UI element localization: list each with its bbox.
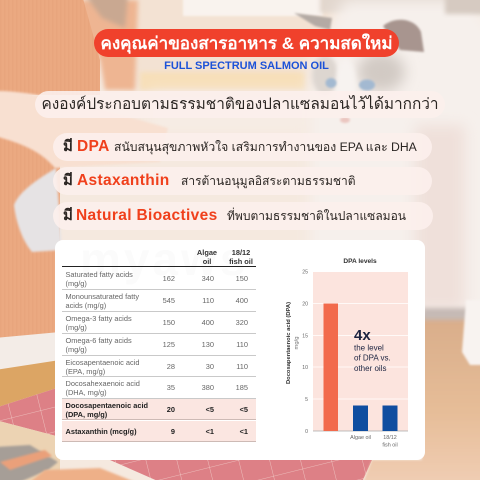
x axis labels: Algae oil xyxy=(350,435,371,441)
title banner xyxy=(94,29,399,57)
table: 185 xyxy=(236,383,248,392)
table: Docosahexaenoic acid xyxy=(66,378,140,388)
callout: 4x: of DPA vs. xyxy=(354,354,391,362)
table: 150 xyxy=(163,318,175,327)
table: (mg/g) xyxy=(66,322,87,332)
table: Eicosapentaenoic acid xyxy=(66,358,139,366)
y axis title xyxy=(286,302,300,384)
table: 110 xyxy=(236,340,248,349)
panel: comparison table and chart xyxy=(55,240,425,460)
heading pill xyxy=(35,91,445,118)
lower sweater xyxy=(0,130,60,342)
table: 150 xyxy=(236,274,248,283)
table and mat xyxy=(0,332,60,370)
table: <5 xyxy=(240,405,248,414)
y axis title: mg/g xyxy=(294,337,300,349)
table: 340 xyxy=(202,274,214,283)
table xyxy=(62,248,256,442)
benefit: DPA: DPA xyxy=(77,138,110,155)
paw xyxy=(462,300,480,365)
bars xyxy=(324,304,338,431)
faint watermark: myaws xyxy=(80,233,248,285)
cat face xyxy=(312,55,338,95)
y axis labels: 0 xyxy=(305,429,308,435)
right wood xyxy=(360,315,480,480)
table header: Algae xyxy=(197,248,217,257)
x axis labels: fish oil xyxy=(382,442,398,448)
x axis labels xyxy=(350,435,398,448)
table: Saturated fatty acids xyxy=(66,270,133,278)
y axis labels: 20 xyxy=(302,302,308,308)
arm xyxy=(0,91,168,168)
table: 125 xyxy=(163,340,175,349)
table: 20 xyxy=(167,405,175,414)
hair xyxy=(85,0,128,28)
benefit: Astaxanthin: Astaxanthin xyxy=(77,172,170,189)
table: Monounsaturated fatty xyxy=(66,292,139,300)
table: 380 xyxy=(202,383,214,392)
table header: 18/12 xyxy=(232,248,250,257)
table: <5 xyxy=(206,405,214,414)
table: (DPA, mg/g) xyxy=(66,410,107,418)
y axis labels: 15 xyxy=(302,334,308,340)
chart title: DPA levels xyxy=(343,258,377,265)
x axis labels: 18/12 xyxy=(383,435,397,441)
y axis title: Docosapentaenoic acid (DPA) xyxy=(286,302,292,384)
table: 110 xyxy=(202,296,214,305)
table: <1 xyxy=(206,427,214,436)
blanket xyxy=(0,445,58,480)
bottle xyxy=(14,168,62,252)
room xyxy=(125,0,335,90)
table: 400 xyxy=(202,318,214,327)
table header: oil xyxy=(203,257,211,266)
table: 35 xyxy=(167,383,175,392)
table header: fish oil xyxy=(229,257,253,266)
table: (mg/g) xyxy=(66,278,87,288)
table: (EPA, mg/g) xyxy=(66,366,105,376)
table: 162 xyxy=(163,274,175,283)
table: 545 xyxy=(163,296,175,305)
benefit: DPA xyxy=(53,133,432,161)
cloth xyxy=(110,460,372,480)
table: Docosapentaenoic acid xyxy=(66,400,148,410)
benefit: Natural Bioactives: Natural Bioactives xyxy=(76,207,218,224)
callout: 4x: the level xyxy=(354,344,384,352)
table: 110 xyxy=(236,362,248,371)
table: (mg/g) xyxy=(66,344,87,354)
table: 30 xyxy=(206,362,214,371)
benefit: Natural Bioactives: ที่พบตามธรรมชาติในปลาแซลมอน xyxy=(227,209,406,223)
benefit: Astaxanthin: สารต้านอนุมูลอิสระตามธรรมชาติ xyxy=(181,174,356,188)
table: 28 xyxy=(167,362,175,371)
y axis labels: 10 xyxy=(302,365,308,371)
benefit: Natural Bioactives xyxy=(53,202,433,230)
callout: 4x: other oils xyxy=(354,364,386,373)
benefit: Astaxanthin: มี xyxy=(63,172,73,189)
heading pill: คงองค์ประกอบตามธรรมชาติของปลาแซลมอนไว้ได้มากกว่า xyxy=(41,96,439,113)
y axis labels: 25 xyxy=(302,270,308,276)
y axis labels xyxy=(302,270,308,435)
table rows xyxy=(62,270,256,442)
title banner: คงคุณค่าของสารอาหาร & ความสดใหม่ xyxy=(100,34,393,53)
y axis labels: 5 xyxy=(305,397,308,403)
bar chart: DPA levels xyxy=(286,258,408,448)
subtitle: FULL SPECTRUM SALMON OIL xyxy=(164,60,329,72)
table: <1 xyxy=(240,427,248,436)
table: 320 xyxy=(236,318,248,327)
sweater xyxy=(60,0,138,90)
benefit: DPA: มี xyxy=(63,138,73,155)
table: Omega-6 fatty acids xyxy=(66,336,132,344)
table: acids (mg/g) xyxy=(66,300,106,310)
table: 9 xyxy=(171,427,175,436)
table: Omega-3 fatty acids xyxy=(66,314,132,322)
table header xyxy=(62,248,256,267)
table: Astaxanthin (mcg/g) xyxy=(66,427,137,436)
benefit: DPA: สนับสนุนสุขภาพหัวใจ เสริมการทำงานของ EPA และ DHA xyxy=(114,140,417,154)
cat body xyxy=(310,0,480,370)
callout: 4x: 4x xyxy=(354,327,371,344)
benefit: Astaxanthin xyxy=(53,167,432,195)
table: 130 xyxy=(202,340,214,349)
table: 400 xyxy=(236,296,248,305)
table: (DHA, mg/g) xyxy=(66,388,107,396)
benefit: Natural Bioactives: มี xyxy=(63,207,73,224)
callout: 4x xyxy=(354,327,391,373)
